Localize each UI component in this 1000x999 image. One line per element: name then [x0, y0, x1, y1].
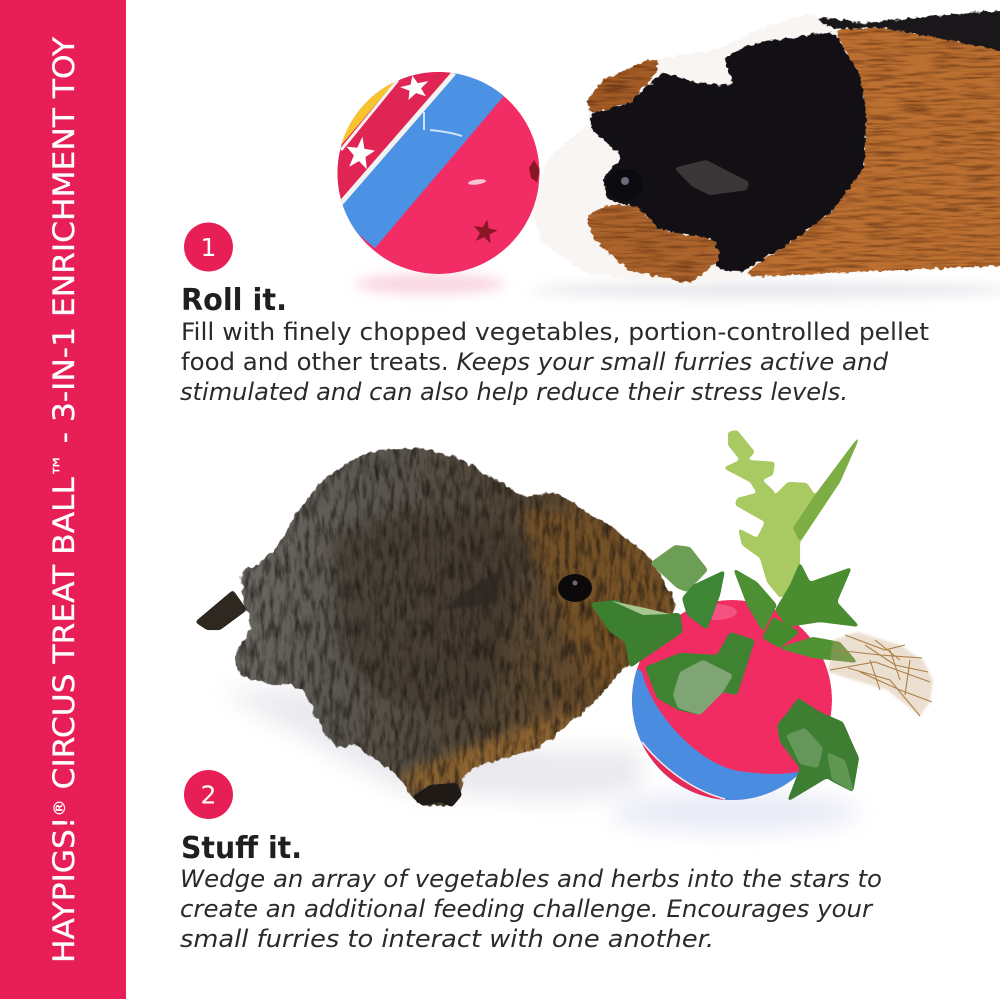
eye [558, 574, 592, 602]
left leaf [590, 600, 683, 668]
text block: Stuff it description [180, 865, 882, 953]
text block: Roll it description [180, 318, 929, 406]
black patch [591, 32, 866, 272]
blue band [632, 668, 798, 800]
heading: Roll it.: Roll it. [181, 283, 287, 318]
sidebar title: HAYPIGS! [47, 827, 81, 963]
body base white [533, 12, 1000, 285]
lettuce [723, 430, 862, 598]
leaf beside head [682, 570, 725, 630]
hind foot [195, 590, 247, 630]
text block: Stuff it description: create an additional feeding challenge. Encourages your [180, 895, 874, 923]
black rear top [804, 10, 1000, 52]
photo: tricolour guinea pig [533, 10, 1000, 285]
photo: guinea pig shadow [530, 282, 1000, 298]
front paw [412, 783, 462, 807]
photo: floor shadow under guinea pig 2 [220, 690, 640, 800]
text block: Stuff it description: small furries to interact with one another. [180, 925, 714, 953]
sidebar title: ® [50, 799, 69, 817]
photo: treat ball 1 [338, 72, 540, 274]
yellow star segment [342, 82, 395, 144]
photo: ball 2 shadow [610, 794, 860, 830]
dried herb sprig [828, 632, 933, 716]
highlights [424, 112, 462, 136]
middle leaf [645, 632, 755, 715]
mint leaves [733, 568, 777, 632]
photo: leafy greens [590, 430, 933, 802]
ear [674, 160, 749, 195]
text block: Stuff it description: Wedge an array of vegetables and herbs into the stars to [180, 865, 882, 893]
heading: Stuff it.: Stuff it. [181, 831, 302, 866]
top strawberry leaf [650, 545, 708, 592]
text block: Roll it description: stimulated and can also help reduce their stress levels. [180, 378, 848, 406]
text block: Roll it description: food and other treats. Keeps your small furries active and [181, 348, 889, 376]
photo: treat ball 2 [625, 600, 832, 810]
dark mid coat [330, 511, 540, 708]
eye [607, 169, 643, 201]
bottom herb cluster [777, 698, 859, 802]
orange rear [740, 28, 1000, 277]
lower sliver [642, 742, 724, 800]
photo: long-haired guinea pig [195, 448, 675, 807]
number badge 2 [184, 770, 233, 819]
body [233, 448, 675, 807]
chest rufous [400, 700, 590, 795]
stars [400, 76, 428, 100]
head rufous [520, 510, 668, 690]
orange cheek [586, 205, 719, 283]
text block: Roll it description: Fill with finely chopped vegetables, portion-controlled pellet [181, 318, 929, 346]
number badge 1 [184, 222, 233, 272]
photo: ball shadow [355, 274, 505, 294]
ear [443, 570, 500, 610]
number badge 2: 2 [201, 780, 216, 810]
sidebar title: - 3-IN-1 ENRICHMENT TOY [47, 37, 81, 453]
panel: red sidebar [0, 0, 126, 999]
number badge 1: 1 [201, 233, 216, 262]
orange forehead [586, 57, 659, 113]
sidebar title: ™ [50, 453, 75, 477]
sidebar title: CIRCUS TREAT BALL [47, 477, 81, 799]
